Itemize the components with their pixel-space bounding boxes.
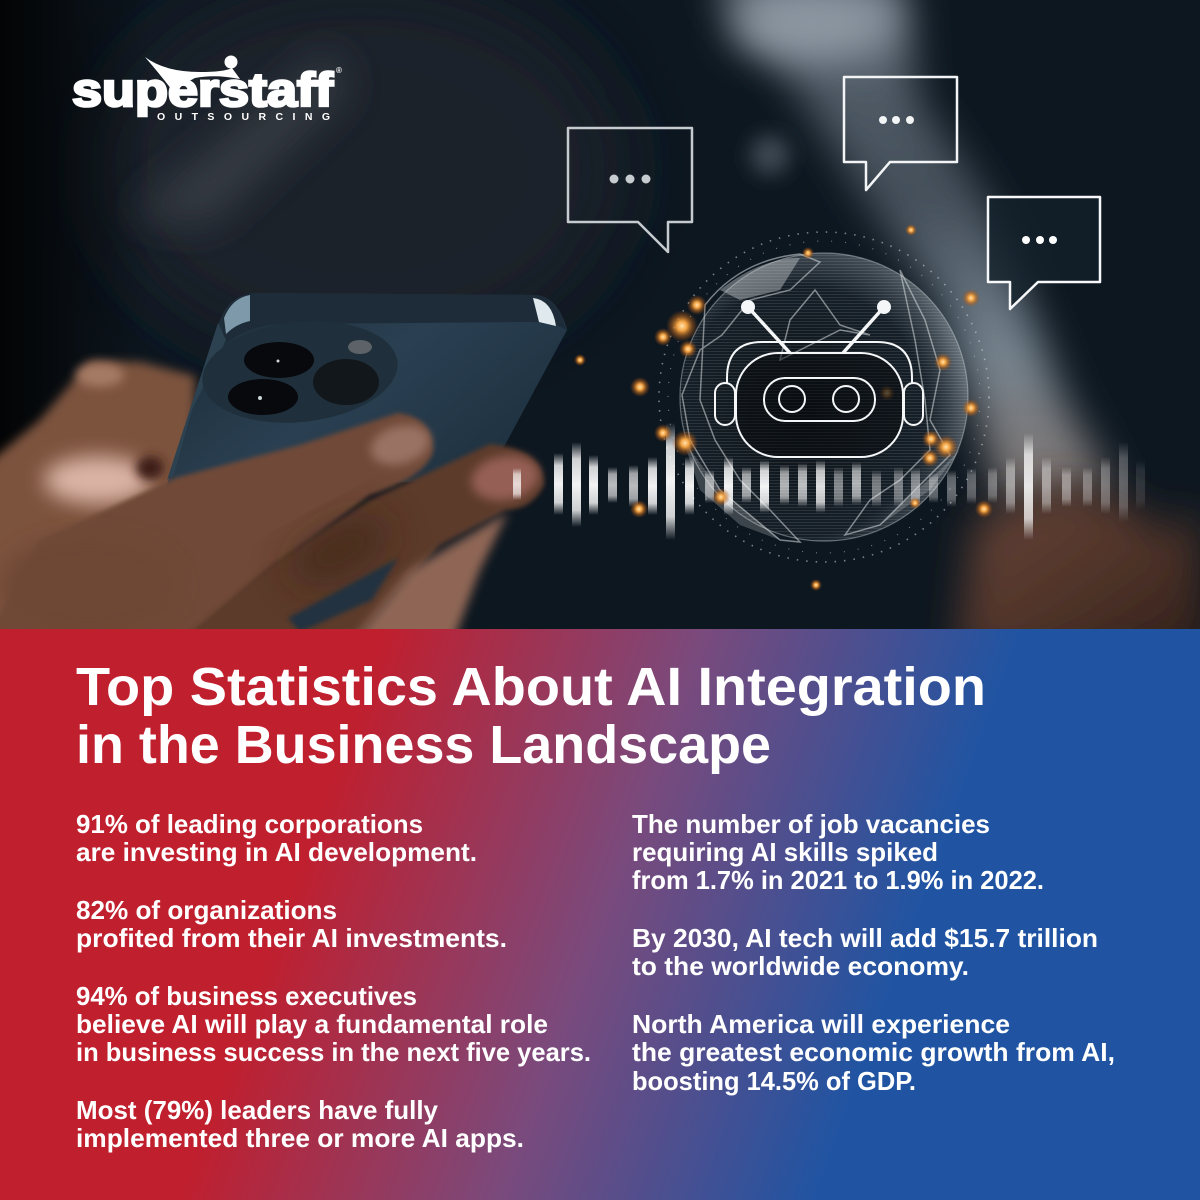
stat: 94% executives: in business success in the next five years. bbox=[76, 1037, 591, 1067]
speech bubble: right bbox=[988, 197, 1100, 309]
stat: North America bbox=[632, 1009, 1115, 1096]
stat: 91% investing: 91% of leading corporations bbox=[76, 809, 423, 839]
stat: 79% leaders: implemented three or more AI apps. bbox=[76, 1123, 524, 1153]
title: Top Statistics About AI Integration bbox=[76, 657, 986, 717]
camera module bbox=[202, 324, 398, 423]
stat: 91% investing: are investing in AI development. bbox=[76, 837, 477, 867]
stat: North America: boosting 14.5% of GDP. bbox=[632, 1066, 916, 1096]
stat: 82% profited bbox=[76, 895, 507, 953]
stat: 94% executives: 94% of business executives bbox=[76, 981, 417, 1011]
stat: 94% executives bbox=[76, 981, 591, 1067]
hologram globe bbox=[659, 232, 989, 562]
stat: 94% executives: believe AI will play a fundamental role bbox=[76, 1009, 548, 1039]
superstaff logo bbox=[72, 56, 342, 123]
superstaff logo: OUTSOURCING bbox=[157, 111, 330, 123]
fingers bbox=[0, 413, 544, 650]
superstaff logo: ® bbox=[336, 66, 342, 75]
stat: job vacancies: The number of job vacancies bbox=[632, 809, 990, 839]
robot head icon bbox=[715, 300, 923, 457]
stat: $15.7 trillion: to the worldwide economy. bbox=[632, 951, 969, 981]
stat: $15.7 trillion: By 2030, AI tech will add $15.7 trillion bbox=[632, 923, 1098, 953]
stat: 79% leaders bbox=[76, 1095, 524, 1153]
stat: North America: the greatest economic growth from AI, bbox=[632, 1037, 1115, 1067]
sound waveform bbox=[513, 423, 1145, 540]
title bbox=[76, 657, 986, 775]
hero photo: person holding a phone bbox=[0, 0, 1200, 660]
stat: North America: North America will experience bbox=[632, 1009, 1010, 1039]
speech bubble: top bbox=[844, 77, 957, 190]
stat: job vacancies bbox=[632, 809, 1044, 895]
gradient text panel bbox=[0, 629, 1200, 1200]
blurred right hand bbox=[955, 485, 1200, 660]
smartphone bbox=[165, 293, 567, 490]
stat: 91% investing bbox=[76, 809, 477, 867]
stat: job vacancies: requiring AI skills spiked bbox=[632, 837, 938, 867]
superstaff logo: superstaff bbox=[72, 63, 333, 116]
title: in the Business Landscape bbox=[76, 715, 771, 775]
stat: job vacancies: from 1.7% in 2021 to 1.9% in 2022. bbox=[632, 865, 1044, 895]
stat: 82% profited: profited from their AI investments. bbox=[76, 923, 507, 953]
orange light particles bbox=[574, 224, 993, 591]
left hand behind phone bbox=[0, 361, 195, 650]
stat: 79% leaders: Most (79%) leaders have fully bbox=[76, 1095, 439, 1125]
stat: 82% profited: 82% of organizations bbox=[76, 895, 337, 925]
speech bubble: left bbox=[568, 128, 692, 252]
continents bbox=[682, 254, 950, 542]
stat: $15.7 trillion bbox=[632, 923, 1098, 981]
